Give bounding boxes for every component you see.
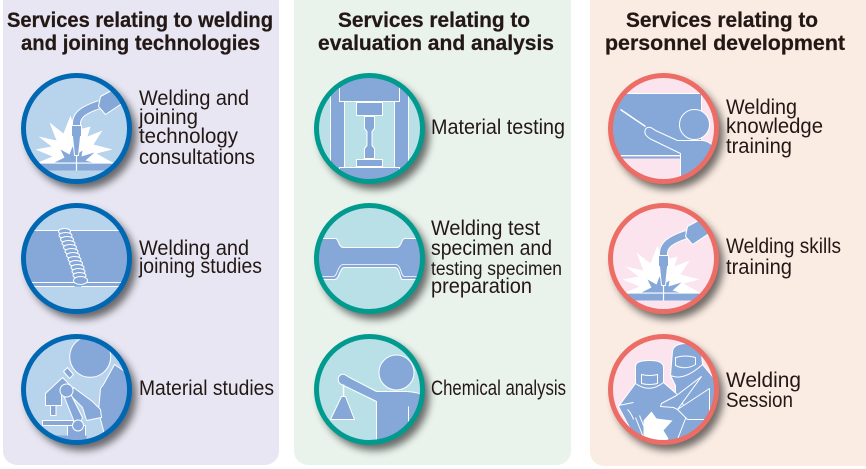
label: material testing: Material testing	[431, 116, 565, 139]
panel: evaluation and analysis	[294, 0, 571, 465]
label: material studies: Material studies	[139, 377, 274, 400]
label: welding test specimen and testing specimen preparation: preparation	[431, 275, 532, 298]
label: welding session: Welding	[726, 369, 801, 392]
label: welding test specimen and testing specimen preparation: specimen and	[431, 237, 552, 260]
heading: welding and joining technologies	[7, 9, 273, 55]
icon: welding skills torch	[608, 204, 724, 320]
label: welding and joining technology consultations	[138, 87, 255, 169]
icon: weld bead	[22, 204, 136, 320]
icon: tensile testing machine	[314, 68, 430, 190]
heading: welding and joining technologies: Services relating to welding	[7, 9, 273, 32]
heading: evaluation and analysis	[318, 9, 554, 55]
icon: welding torch consultation	[22, 74, 136, 190]
label: welding skills training: Welding skills	[726, 235, 841, 258]
heading: personnel development: personnel development	[605, 32, 845, 55]
label: welding skills training	[726, 235, 841, 279]
label: welding session	[726, 369, 801, 412]
label: welding knowledge training	[726, 96, 823, 158]
icon: person with microscope	[22, 334, 136, 450]
label: welding session: Session	[726, 389, 793, 412]
label: welding knowledge training: knowledge	[726, 115, 823, 138]
heading: evaluation and analysis: evaluation and analysis	[318, 32, 554, 55]
panel: personnel development	[590, 0, 866, 466]
label: welding and joining studies	[138, 237, 262, 278]
icon: instructor at blackboard	[604, 74, 724, 190]
heading: personnel development: Services relating to	[626, 9, 818, 32]
label: welding and joining studies: Welding and	[139, 237, 249, 260]
label: welding and joining technology consultations: Welding and	[139, 87, 249, 110]
label: welding and joining technology consultations: consultations	[139, 146, 255, 169]
label: welding and joining technology consultations: joining	[138, 106, 198, 129]
label: welding test specimen and testing specimen preparation: testing specimen	[431, 259, 562, 280]
panel: welding and joining technologies	[3, 0, 279, 465]
heading: welding and joining technologies: and joining technologies	[21, 32, 260, 55]
label: welding test specimen and testing specimen preparation	[431, 217, 562, 298]
label: chemical analysis: Chemical analysis	[431, 377, 566, 400]
label: welding and joining studies: joining studies	[138, 255, 262, 278]
icon: person holding flask	[314, 334, 430, 450]
label: welding knowledge training: Welding	[726, 96, 797, 119]
label: welding test specimen and testing specimen preparation: Welding test	[431, 217, 540, 240]
icon: test specimen	[314, 204, 430, 320]
label: welding knowledge training: training	[726, 135, 792, 158]
icon: two welders in masks	[608, 334, 724, 450]
label: welding skills training: training	[726, 256, 792, 279]
label: welding and joining technology consultations: technology	[139, 125, 238, 148]
heading: evaluation and analysis: Services relating to	[338, 9, 530, 32]
heading: personnel development	[605, 9, 845, 55]
